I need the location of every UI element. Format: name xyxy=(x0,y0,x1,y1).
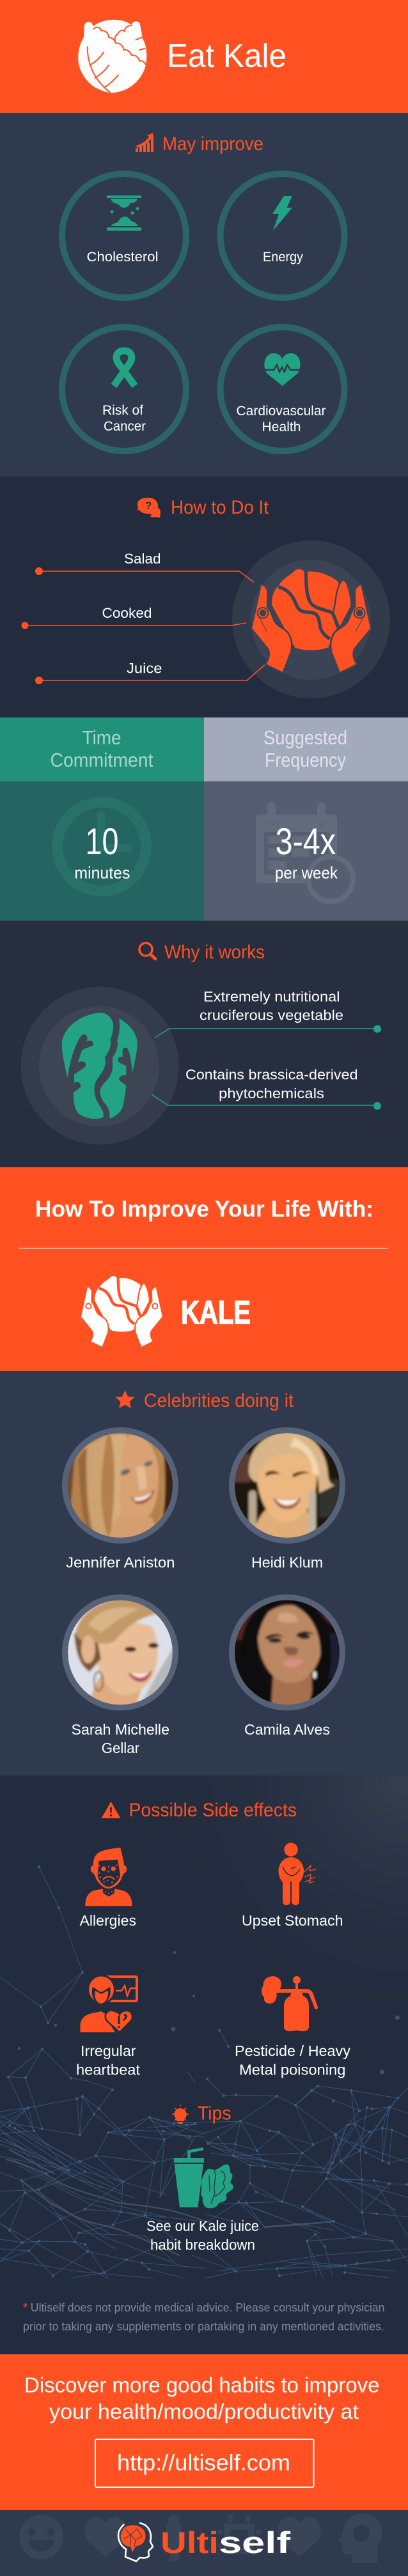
illustration backdrop circles xyxy=(20,986,179,1145)
callout: nutritional xyxy=(155,989,381,1038)
link box xyxy=(95,2439,313,2487)
title: Eat Kale xyxy=(167,38,286,75)
icon: cholesterol hourglass xyxy=(107,195,141,231)
heading: may improve: May improve xyxy=(162,134,263,155)
link box: http://ultiself.com xyxy=(117,2451,290,2475)
icon: patient with monitor xyxy=(81,1975,137,2032)
callout: juice: Juice xyxy=(127,661,162,676)
icon: kale leaf xyxy=(62,1013,137,1119)
label: Irregular xyxy=(81,2043,136,2059)
heading: time commitment: Commitment xyxy=(50,749,153,771)
label: Camila Alves xyxy=(244,1721,330,1738)
side effect: irregular heartbeat xyxy=(76,1975,141,2078)
background network pattern xyxy=(0,1867,408,2278)
heading: how to do it: ? xyxy=(145,500,152,512)
label: Cancer xyxy=(104,419,146,434)
call to action text xyxy=(24,2373,380,2423)
panel: suggested frequency xyxy=(204,717,408,921)
panel: footer xyxy=(0,2510,408,2576)
heading: time commitment: Time xyxy=(82,726,122,749)
callout: juice xyxy=(35,661,267,684)
callout: phytochemicals xyxy=(152,1067,381,1110)
heading: possible side effects: Possible Side effects xyxy=(129,1800,297,1821)
callout: salad: Salad xyxy=(124,551,161,567)
icon: spray bottle xyxy=(262,1976,318,2031)
header band xyxy=(0,0,408,113)
call to action text: your health/mood/productivity at xyxy=(49,2400,359,2423)
callout: nutritional: Extremely nutritional xyxy=(203,989,340,1004)
circle: risk of cancer xyxy=(62,327,186,451)
icon: person holding stomach xyxy=(279,1843,316,1905)
side effect: pesticide poisoning xyxy=(235,1976,350,2078)
value xyxy=(74,821,130,882)
label: Cholesterol xyxy=(87,250,159,264)
heading: suggested frequency: Frequency xyxy=(265,749,346,771)
callout: salad xyxy=(35,551,254,583)
banner heading: How To Improve Your Life With: xyxy=(35,1196,373,1222)
label xyxy=(146,2218,259,2253)
label: See our Kale juice xyxy=(146,2218,259,2234)
value xyxy=(275,821,338,882)
label: Health xyxy=(262,420,301,434)
footer watermark icons xyxy=(19,2513,382,2563)
icon: juice cup xyxy=(174,2149,204,2207)
callout: cooked xyxy=(22,605,246,629)
celebrity: camila alves xyxy=(231,1597,343,1738)
label: Sarah Michelle xyxy=(72,1721,169,1738)
label xyxy=(235,2043,350,2078)
callout: cooked: Cooked xyxy=(102,605,152,621)
disclaimer xyxy=(23,2301,385,2333)
heading: celebrities: Celebrities doing it xyxy=(144,1390,294,1411)
label: Upset Stomach xyxy=(242,1912,343,1929)
circle: cholesterol xyxy=(62,174,186,298)
icon: clock watermark xyxy=(58,802,146,891)
callout: nutritional: cruciferous vegetable xyxy=(200,1007,343,1023)
label: Pesticide / Heavy xyxy=(235,2043,350,2059)
panel: call to action xyxy=(0,2354,408,2510)
icon: kale head xyxy=(78,20,146,93)
icon: hands holding kale xyxy=(252,569,370,672)
heading: tips xyxy=(172,2103,231,2124)
heading: suggested frequency: Suggested xyxy=(263,726,347,749)
heading: how to do it: How to Do It xyxy=(171,497,269,518)
logo icon: brain head xyxy=(118,2523,153,2561)
label xyxy=(72,1721,169,1756)
label: Risk of xyxy=(102,403,143,418)
side effect: allergies xyxy=(79,1848,136,1929)
label: Jennifer Aniston xyxy=(66,1554,175,1570)
heading: suggested frequency xyxy=(263,726,347,771)
circle: energy xyxy=(220,174,344,298)
call to action text: Discover more good habits to improve xyxy=(24,2373,380,2397)
panel: may improve xyxy=(0,113,408,477)
icon: white hands holding kale xyxy=(81,1276,162,1347)
logo: ultiself: self xyxy=(219,2526,290,2559)
panel: how to do it xyxy=(0,477,408,717)
value: 3-4x xyxy=(276,821,336,862)
panel: celebrities xyxy=(0,1371,408,1775)
logo: ultiself: Ulti xyxy=(161,2526,219,2559)
heading: time commitment xyxy=(50,726,153,771)
disclaimer: * Ultiself does not provide medical advice. Please consult your physician xyxy=(23,2301,385,2314)
icon: heart pulse xyxy=(264,353,301,386)
circle: cardiovascular health xyxy=(220,327,344,451)
callout: phytochemicals: Contains brassica-derived xyxy=(185,1067,358,1082)
value: 10 xyxy=(86,821,119,862)
banner word: KALE xyxy=(181,1294,251,1330)
label: Gellar xyxy=(102,1740,139,1756)
panel: how to improve banner xyxy=(0,1167,408,1371)
heading: tips: Tips xyxy=(198,2103,231,2124)
celebrity: heidi klum xyxy=(231,1430,343,1570)
panel: side effects and tips background xyxy=(0,1775,408,2354)
icon: bolt xyxy=(272,196,292,231)
celebrity: sarah michelle gellar xyxy=(65,1597,175,1756)
icon: kale leaf small xyxy=(201,2165,233,2208)
logo: ultiself xyxy=(118,2523,290,2561)
label: Metal poisoning xyxy=(239,2061,345,2078)
label: habit breakdown xyxy=(150,2236,255,2253)
icon: calendar watermark xyxy=(256,802,353,901)
disclaimer: prior to taking any supplements or partaking in any mentioned activities. xyxy=(23,2320,384,2333)
tip: kale juice xyxy=(146,2149,259,2253)
label xyxy=(102,403,146,434)
label: Allergies xyxy=(79,1912,136,1929)
panel: time commitment xyxy=(0,717,204,921)
icon: ribbon xyxy=(114,351,135,386)
illustration backdrop circles xyxy=(232,540,390,698)
icon: allergy face xyxy=(85,1848,132,1906)
panel: why it works xyxy=(0,921,408,1167)
icon: light bulb xyxy=(172,2104,189,2124)
label: Cardiovascular xyxy=(237,404,326,418)
callout: phytochemicals: phytochemicals xyxy=(219,1085,324,1101)
side effect: upset stomach xyxy=(242,1843,343,1929)
heading: why it works: Why it works xyxy=(164,942,265,963)
label: Energy xyxy=(263,250,303,264)
label: Heidi Klum xyxy=(251,1554,323,1570)
label xyxy=(237,404,326,434)
celebrity: jennifer aniston xyxy=(65,1430,175,1570)
label: heartbeat xyxy=(76,2061,141,2078)
label xyxy=(76,2043,141,2078)
value: per week xyxy=(275,863,338,882)
value: minutes xyxy=(74,863,130,882)
